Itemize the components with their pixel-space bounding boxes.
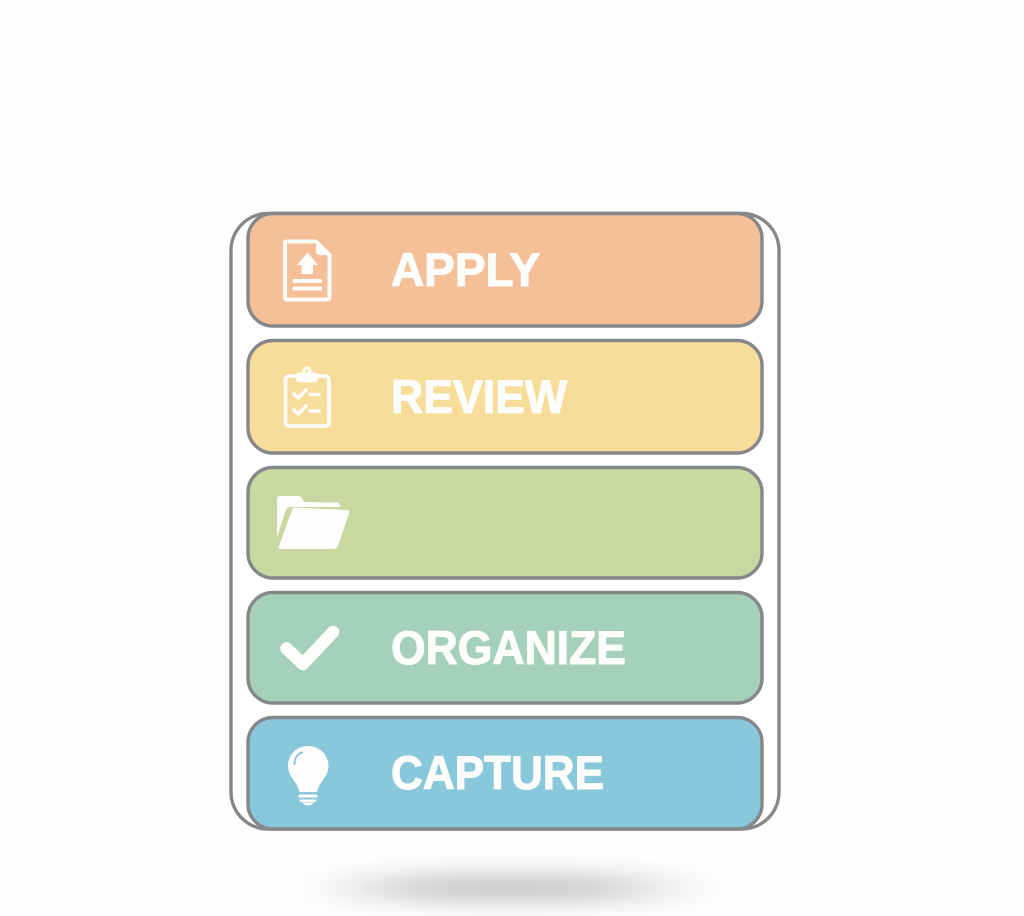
label: REVIEW: REVIEW bbox=[391, 370, 568, 423]
panel: review bbox=[248, 340, 762, 453]
outer frame bbox=[231, 214, 779, 829]
icon: document upload bbox=[285, 242, 330, 300]
icon: check mark bbox=[286, 632, 333, 664]
label: APPLY: APPLY bbox=[391, 243, 540, 296]
panel: apply bbox=[248, 214, 762, 326]
icon: open folder bbox=[277, 496, 349, 549]
label: CAPTURE: CAPTURE bbox=[391, 746, 604, 799]
panel: green empty row bbox=[248, 468, 762, 578]
icon: clipboard checklist bbox=[286, 366, 329, 426]
panel: organize bbox=[248, 592, 762, 703]
ground shadow bbox=[350, 875, 670, 901]
panel: capture bbox=[248, 718, 762, 829]
icon: light bulb bbox=[288, 746, 328, 806]
label: ORGANIZE: ORGANIZE bbox=[391, 621, 626, 674]
